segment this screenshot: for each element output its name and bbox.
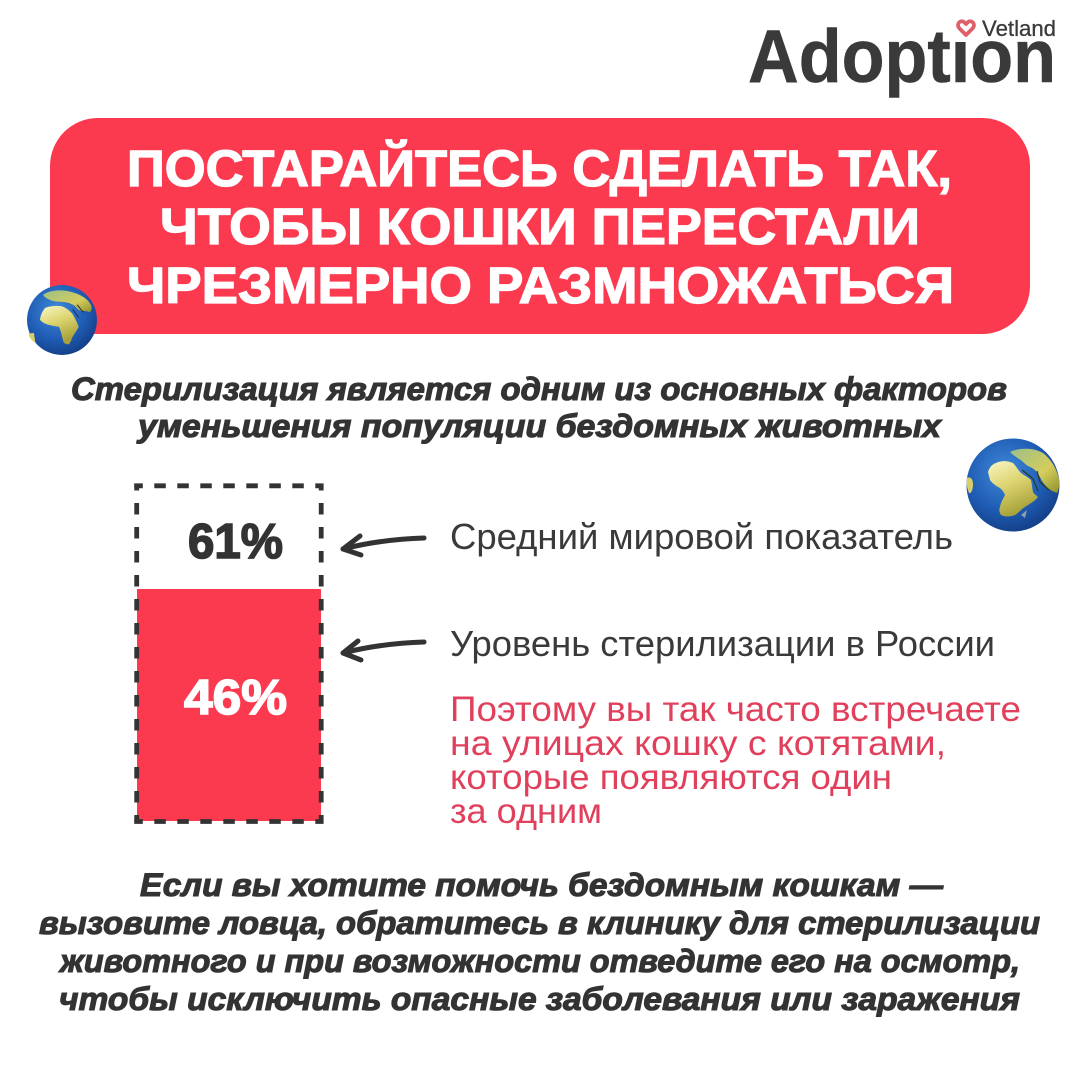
icon: small globe [27,285,97,355]
arrow: to 46% [343,641,424,660]
value: 46%: 46% [184,671,287,725]
subtitle: уменьшения популяции бездомных животных [136,408,942,444]
heading panel [50,118,1030,334]
closing advice [39,867,1040,1017]
closing advice: животного и при возможности отведите его на осмотр, [58,943,1020,979]
panel background [50,118,1030,334]
label: world average: Средний мировой показатель [450,516,953,557]
logo wordmark: Adoption [748,14,1056,98]
heading: ЧРЕЗМЕРНО РАЗМНОЖАТЬСЯ [127,257,954,314]
red explanation text: которые появляются один [450,758,892,797]
closing advice: вызовите ловца, обратитесь в клинику для стерилизации [39,905,1040,941]
red explanation text: Поэтому вы так часто встречаете [450,690,1021,729]
bar chart [134,484,324,824]
red explanation text: за одним [450,792,602,831]
arrow: to 61% [343,536,424,555]
world average dashed outline [134,484,324,824]
label: Russia: Уровень стерилизации в России [450,623,995,664]
heading: ЧТОБЫ КОШКИ ПЕРЕСТАЛИ [160,198,920,255]
closing advice: Если вы хотите помочь бездомным кошкам — [140,867,944,903]
logo heart icon [958,21,974,35]
red explanation text [450,690,1021,831]
logo brand name: Vetland [982,16,1056,41]
Russia bar [137,589,321,821]
heading: ПОСТАРАЙТЕСЬ СДЕЛАТЬ ТАК, [127,139,952,197]
icon: large globe [966,438,1060,532]
logo [748,14,1056,98]
red explanation text: на улицах кошку с котятами, [450,724,946,763]
closing advice: чтобы исключить опасные заболевания или заражения [59,981,1020,1017]
heading [127,139,954,314]
value: 61%: 61% [188,515,283,569]
subtitle: Стерилизация является одним из основных факторов [71,371,1007,407]
subtitle [71,371,1007,444]
